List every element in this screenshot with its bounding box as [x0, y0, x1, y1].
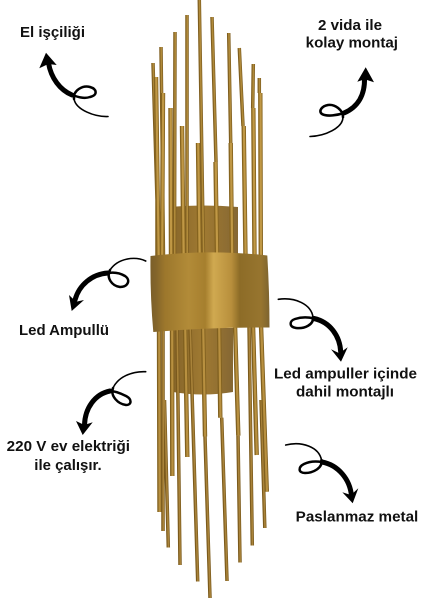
arrow: Led ampuller içinde [278, 299, 348, 362]
label: 2 vida ile kolay montaj [306, 18, 398, 52]
label: 220 V ev elektriği ile çalışır.: ile çalışır. [34, 458, 102, 474]
lower gold rods [159, 325, 267, 598]
arrow: 220 V [76, 372, 146, 435]
label: Paslanmaz metal: Paslanmaz metal [296, 510, 418, 526]
arrow: 2 vida ile [310, 67, 374, 136]
label: 2 vida ile kolay montaj: 2 vida ile [318, 18, 382, 34]
label: 220 V ev elektriği ile çalışır. [7, 439, 130, 474]
label: Led ampuller içinde dahil montajlı: Led ampuller içinde [274, 366, 417, 382]
label: 220 V ev elektriği ile çalışır.: 220 V ev elektriği [7, 439, 130, 455]
label: 2 vida ile kolay montaj: kolay montaj [306, 36, 398, 52]
wall lamp [150, 0, 270, 598]
label: El işçiliği: El işçiliği [20, 25, 85, 41]
label: Led Ampullü: Led Ampullü [19, 323, 109, 339]
label: Led ampuller içinde dahil montajlı [274, 366, 417, 401]
upper gold rods [153, 0, 261, 258]
label: Led ampuller içinde dahil montajlı: dahil montajlı [296, 385, 394, 401]
brass band [150, 252, 270, 332]
arrow: El işçiliği [39, 53, 108, 117]
arrow: Paslanmaz metal [286, 444, 358, 503]
arrow: Led Ampullü [69, 258, 146, 311]
back mounting plate [169, 206, 238, 394]
